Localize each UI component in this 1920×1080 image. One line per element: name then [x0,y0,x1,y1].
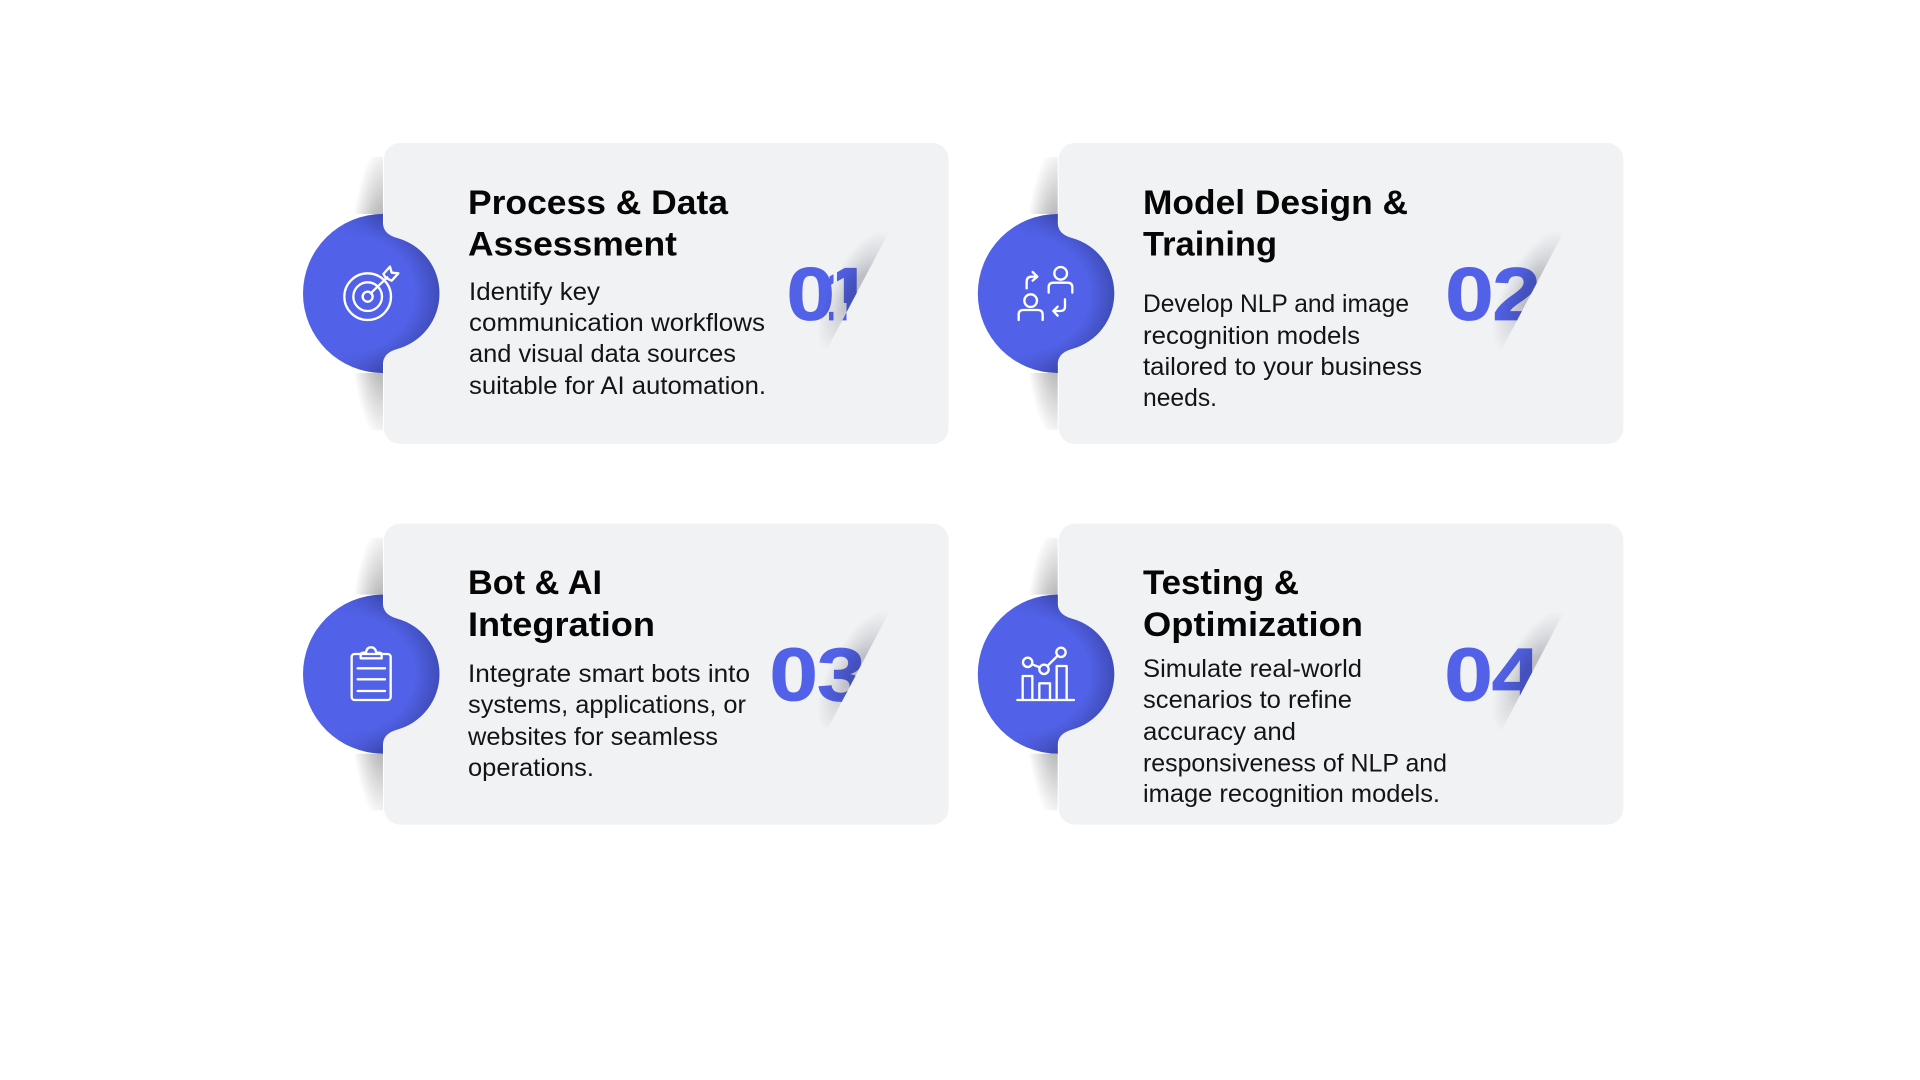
heading 01: Process & Data [468,184,729,222]
card shadow 04 [1031,538,1058,810]
description 03: systems, applications, or [468,691,746,719]
number 01 with fold [790,238,884,342]
description 01: communication workflows [469,309,765,337]
card background 02 [1059,143,1623,444]
heading 02: Model Design & [1143,184,1408,222]
icon badge 02 [978,214,1114,373]
number 01 with fold: 0 [786,253,835,337]
description 04: accuracy and [1143,718,1296,746]
number 02 with fold [1448,238,1559,343]
card shadow 03 [356,538,383,810]
icon: people exchanging [1019,267,1072,320]
description 03: Integrate smart bots into [468,660,750,688]
icon: target with arrow [344,267,398,320]
heading 04: Testing & [1143,564,1299,602]
number 03 with fold: 3 [817,633,865,717]
card shadow 02 [1031,157,1058,430]
card background 04 [1059,524,1623,825]
heading 03: Integration [468,606,655,644]
number 03 with fold: 0 [770,633,818,717]
icon: bar chart with trend line [1017,648,1074,700]
infographic canvas [303,143,1623,824]
description 01: and visual data sources [469,340,736,368]
description 01: Identify key [469,278,601,306]
description 02: tailored to your business [1143,353,1422,381]
number 02 with fold: 0 [1445,253,1494,337]
number 02 with fold: 2 [1492,253,1541,337]
panel: step 04 testing and optimization [978,524,1623,825]
description 01: suitable for AI automation. [469,372,766,400]
number 04 with fold: 4 [1492,633,1540,717]
icon: clipboard [352,647,391,700]
description 04: Simulate real-world [1143,655,1362,683]
panel: step 02 model design and training [978,143,1623,444]
card background 01 [384,143,948,444]
description 03: operations. [468,754,594,782]
description 02: Develop NLP and image [1143,290,1409,318]
card background 03 [384,524,948,825]
heading 01: Assessment [468,226,677,264]
card shadow 01 [356,157,383,430]
description 04: responsiveness of NLP and [1143,750,1447,778]
heading 04: Optimization [1143,606,1363,644]
description 04: image recognition models. [1143,780,1440,808]
number 01 with fold: 1 [824,253,872,337]
number 03 with fold [772,619,884,724]
panel: step 03 bot and AI integration [303,524,948,825]
number 04 with fold: 0 [1444,633,1493,717]
heading 02: Training [1143,226,1277,264]
icon badge 01 [303,214,439,373]
number 04 with fold [1447,619,1560,724]
description 03: websites for seamless [467,723,718,751]
heading 03: Bot & AI [468,564,602,602]
description 02: needs. [1143,384,1217,412]
icon badge 04 [978,595,1114,754]
description 02: recognition models [1143,322,1360,350]
icon badge 03 [303,595,439,754]
description 04: scenarios to refine [1143,686,1352,714]
panel: step 01 process and data assessment [303,143,948,444]
